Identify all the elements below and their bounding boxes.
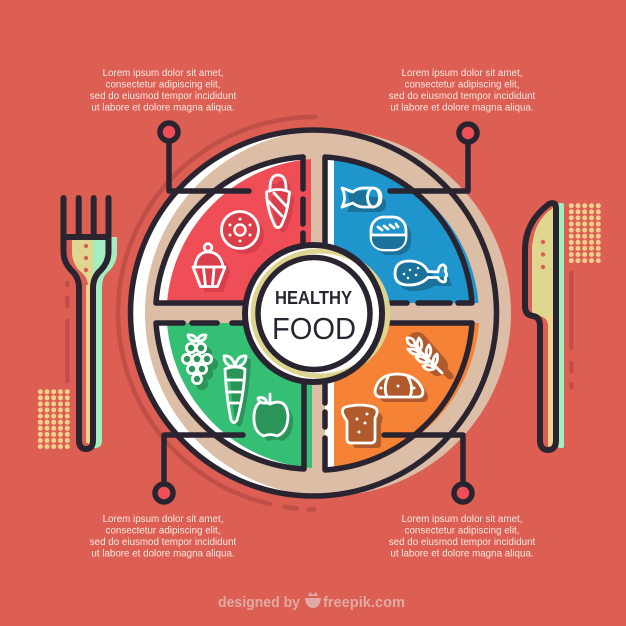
bottom left text block: sed do eiusmod tempor incididunt [90, 537, 237, 548]
bottom right text block: consectetur adipiscing elit, [405, 526, 519, 536]
footer credit [218, 592, 405, 611]
top right text block [389, 68, 536, 114]
decorative plate shadow arc [118, 117, 315, 509]
bottom right text block: Lorem ipsum dolor sit amet, [402, 514, 522, 525]
top left text block: Lorem ipsum dolor sit amet, [103, 68, 223, 79]
knife side dashes [569, 273, 574, 387]
icon: freepik logo [305, 592, 321, 608]
icon: fish can [342, 188, 386, 212]
icon: toast [342, 405, 383, 448]
top right text block: consectetur adipiscing elit, [405, 80, 519, 90]
bottom left text block: Lorem ipsum dolor sit amet, [103, 514, 223, 525]
panel: grains quadrant [325, 323, 479, 470]
icon: donut [222, 212, 264, 254]
quadrant outlines [156, 157, 472, 470]
icon: grapes [182, 335, 218, 390]
knife [525, 203, 564, 450]
top left text block: sed do eiusmod tempor incididunt [90, 91, 237, 102]
callout connector: bottom right [384, 435, 472, 502]
icon: chicken leg [395, 261, 452, 291]
callout connector: top left [160, 123, 249, 191]
title badge: FOOD [272, 311, 356, 346]
bottom left text block: consectetur adipiscing elit, [106, 526, 220, 536]
icon: bun [371, 217, 411, 255]
top left text block [90, 68, 237, 114]
callout connector: bottom left [155, 435, 243, 502]
icon: apple [254, 394, 293, 441]
top right text block: Lorem ipsum dolor sit amet, [402, 68, 522, 79]
plate [130, 130, 511, 496]
bottom right text block: ut labore et dolore magna aliqua. [390, 548, 534, 560]
title badge [245, 245, 388, 382]
top left text block: ut labore et dolore magna aliqua. [91, 102, 235, 114]
bottom left text block: ut labore et dolore magna aliqua. [91, 548, 235, 560]
icon: ice cream [266, 175, 294, 232]
top left text block: consectetur adipiscing elit, [106, 80, 220, 90]
top right text block: sed do eiusmod tempor incididunt [389, 91, 536, 102]
fork [64, 198, 117, 449]
bottom right text block: sed do eiusmod tempor incididunt [389, 537, 536, 548]
bottom right text block [389, 514, 536, 560]
fork side dashes [65, 283, 70, 381]
panel: sweets quadrant [156, 157, 311, 303]
footer credit: designed by [218, 595, 300, 611]
panel: fruit and vegetable quadrant [156, 323, 312, 469]
dot pattern right [569, 203, 601, 263]
title: HEALTHY [275, 288, 352, 308]
top right text block: ut labore et dolore magna aliqua. [390, 102, 534, 114]
callout connector: top right [390, 124, 477, 191]
icon: cupcake [193, 244, 230, 292]
icon: wheat [407, 338, 450, 376]
bottom left text block [90, 514, 237, 560]
footer credit: freepik.com [323, 595, 405, 611]
icon: carrot [224, 356, 251, 426]
dot pattern left [38, 389, 70, 449]
icon: croissant [375, 374, 428, 402]
panel: protein quadrant [325, 157, 478, 303]
